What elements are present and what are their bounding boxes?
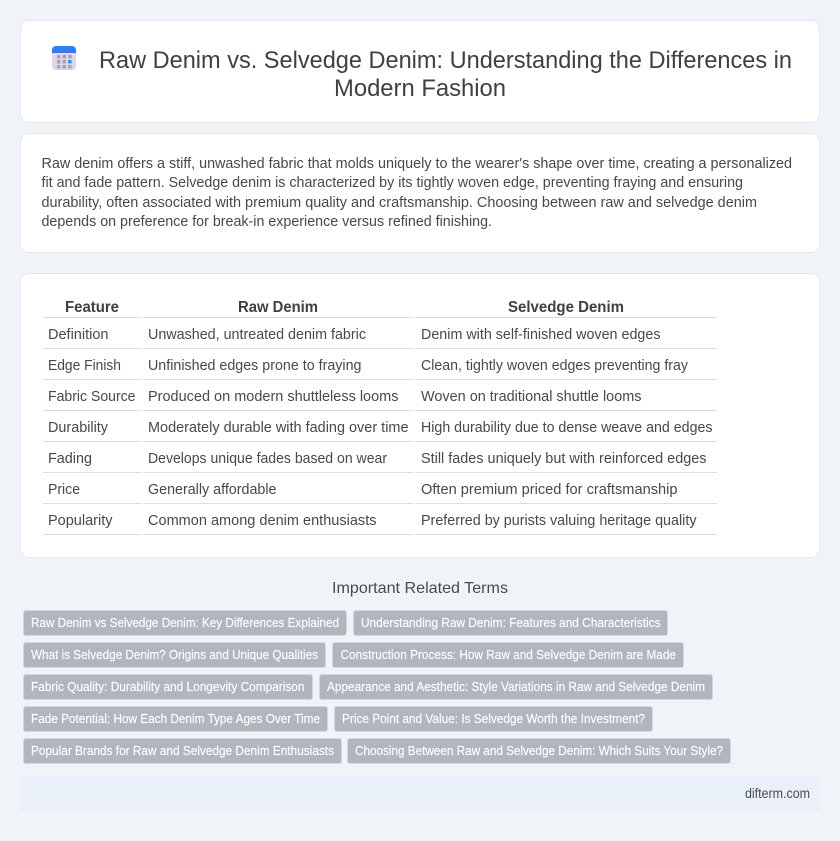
related terms tags: Choosing Between Raw and Selvedge Denim: Which Suits Your Style?: [355, 743, 723, 758]
column: raw denim: Unfinished edges prone to fraying: [148, 358, 362, 374]
table header: [65, 299, 624, 316]
column: selvedge denim: Preferred by purists valuing heritage quality: [421, 513, 697, 529]
icon: calendar: [52, 46, 76, 70]
column: feature: Popularity: [48, 513, 113, 529]
text block: intro paragraph: durability, often associated with premium quality and craftsmanship. Choosing between raw and selvedge denim: [42, 195, 757, 211]
column: raw denim: Produced on modern shuttleless looms: [148, 389, 398, 405]
related terms tags: Construction Process: How Raw and Selvedge Denim are Made: [340, 647, 676, 662]
column: feature: [48, 327, 136, 529]
column: selvedge denim: Often premium priced for craftsmanship: [421, 482, 678, 498]
related terms tags: Raw Denim vs Selvedge Denim: Key Differences Explained: [31, 615, 339, 630]
column: feature: Edge Finish: [48, 358, 121, 374]
related terms tags: Price Point and Value: Is Selvedge Worth the Investment?: [342, 711, 645, 726]
panel: comparison table: [20, 274, 820, 558]
related terms tags: Fabric Quality: Durability and Longevity Comparison: [31, 679, 304, 694]
related terms tags: Fade Potential: How Each Denim Type Ages Over Time: [31, 711, 320, 726]
text block: intro paragraph: fit and fade pattern. Selvedge denim is characterized by its tightly woven edge, preventing fraying and ensuring: [42, 175, 743, 191]
column: feature: Fabric Source: [48, 389, 136, 405]
table grid lines: [43, 317, 717, 535]
column: feature: Fading: [48, 451, 92, 467]
text block: intro paragraph: [42, 156, 792, 230]
text block: intro paragraph: depends on preference for break-in experience versus refined finishing.: [42, 214, 492, 230]
column: selvedge denim: Denim with self-finished woven edges: [421, 327, 660, 343]
related terms tags: Popular Brands for Raw and Selvedge Denim Enthusiasts: [31, 743, 334, 758]
text block: intro paragraph: Raw denim offers a stiff, unwashed fabric that molds uniquely to the wearer's shape over time, creating a personalized: [42, 156, 792, 172]
table header: Selvedge Denim: [508, 299, 624, 316]
related terms tags: [24, 610, 730, 764]
column: selvedge denim: Clean, tightly woven edges preventing fray: [421, 358, 689, 374]
column: raw denim: Generally affordable: [148, 482, 276, 498]
related terms tags: Appearance and Aesthetic: Style Variations in Raw and Selvedge Denim: [327, 679, 705, 694]
column: selvedge denim: [421, 327, 712, 529]
related terms tags: Understanding Raw Denim: Features and Characteristics: [361, 615, 661, 630]
table header: Raw Denim: [238, 299, 318, 316]
footer bar: difterm.com: [745, 786, 810, 801]
panel: intro text: [20, 134, 820, 252]
heading: related terms: Important Related Terms: [332, 580, 508, 597]
related terms tags: What is Selvedge Denim? Origins and Unique Qualities: [31, 647, 318, 662]
column: feature: Durability: [48, 420, 109, 436]
column: selvedge denim: Woven on traditional shuttle looms: [421, 389, 642, 405]
column: feature: Price: [48, 482, 80, 498]
title: Modern Fashion: [334, 75, 506, 102]
column: raw denim: Moderately durable with fading over time: [148, 420, 408, 436]
column: raw denim: Unwashed, untreated denim fabric: [148, 327, 366, 343]
column: raw denim: [148, 327, 408, 529]
column: selvedge denim: Still fades uniquely but with reinforced edges: [421, 451, 706, 467]
panel: title card: [20, 20, 820, 122]
title: [99, 47, 792, 102]
title: Raw Denim vs. Selvedge Denim: Understanding the Differences in: [99, 47, 792, 74]
column: raw denim: Common among denim enthusiasts: [148, 513, 376, 529]
column: feature: Definition: [48, 327, 108, 343]
table header: Feature: [65, 299, 119, 316]
column: selvedge denim: High durability due to dense weave and edges: [421, 420, 712, 436]
footer bar: [20, 777, 820, 811]
column: raw denim: Develops unique fades based on wear: [148, 451, 387, 467]
